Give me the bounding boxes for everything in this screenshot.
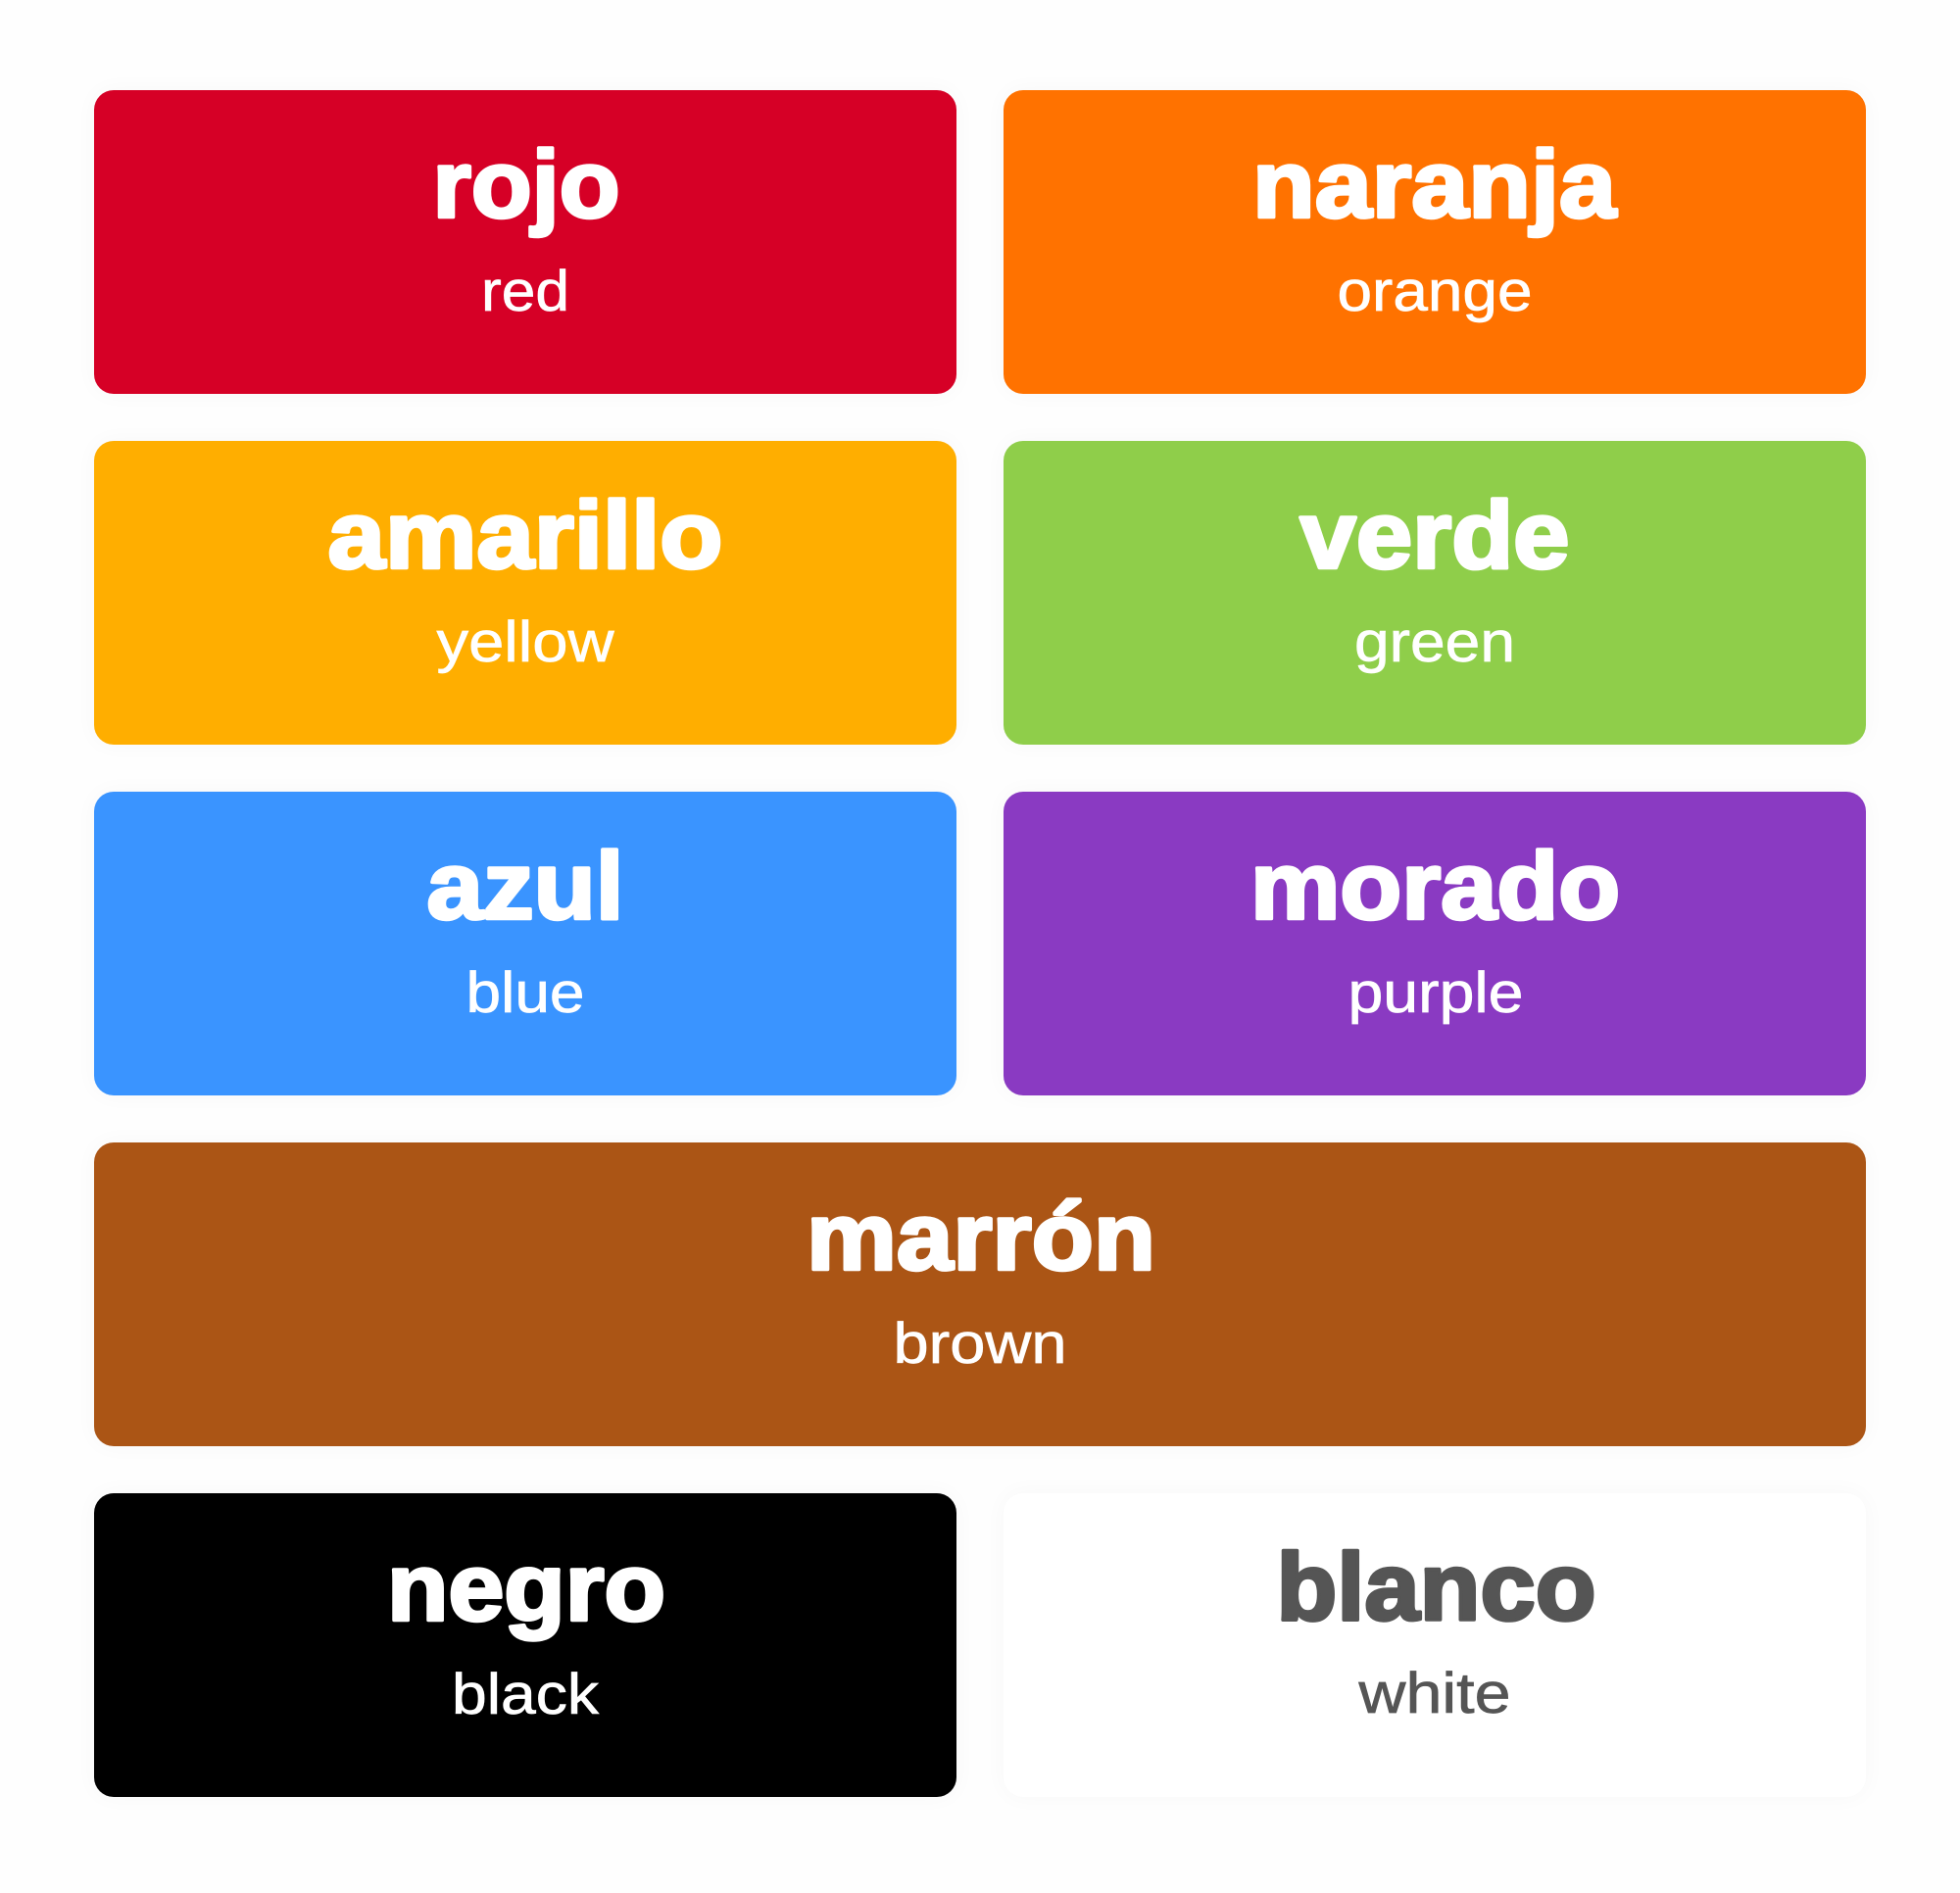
card: naranja xyxy=(1004,90,1866,394)
word: naranja: naranja xyxy=(1252,131,1617,237)
card: blanco xyxy=(1004,1493,1866,1797)
word: marrón: marrón xyxy=(807,1184,1155,1289)
word: negro: negro xyxy=(387,1534,665,1640)
card: amarillo xyxy=(94,441,956,745)
translation: yellow: yellow xyxy=(437,610,615,674)
translation: blue: blue xyxy=(466,961,584,1025)
card: rojo xyxy=(94,90,956,394)
translation: purple: purple xyxy=(1348,961,1523,1025)
translation: white: white xyxy=(1357,1662,1511,1725)
word: azul: azul xyxy=(427,833,623,939)
translation: black: black xyxy=(452,1663,600,1726)
translation: orange: orange xyxy=(1337,260,1533,323)
translation: brown: brown xyxy=(894,1312,1066,1376)
card: azul xyxy=(94,792,956,1095)
word: verde: verde xyxy=(1299,482,1570,588)
translation: green: green xyxy=(1354,610,1515,674)
card: negro xyxy=(94,1493,956,1797)
word: morado: morado xyxy=(1250,833,1620,939)
word: amarillo: amarillo xyxy=(327,482,723,588)
card: verde xyxy=(1004,441,1866,745)
translation: red: red xyxy=(481,260,569,323)
card: marrón xyxy=(94,1142,1866,1446)
card: morado xyxy=(1004,792,1866,1095)
word: rojo: rojo xyxy=(433,131,619,237)
word: blanco: blanco xyxy=(1276,1533,1595,1640)
